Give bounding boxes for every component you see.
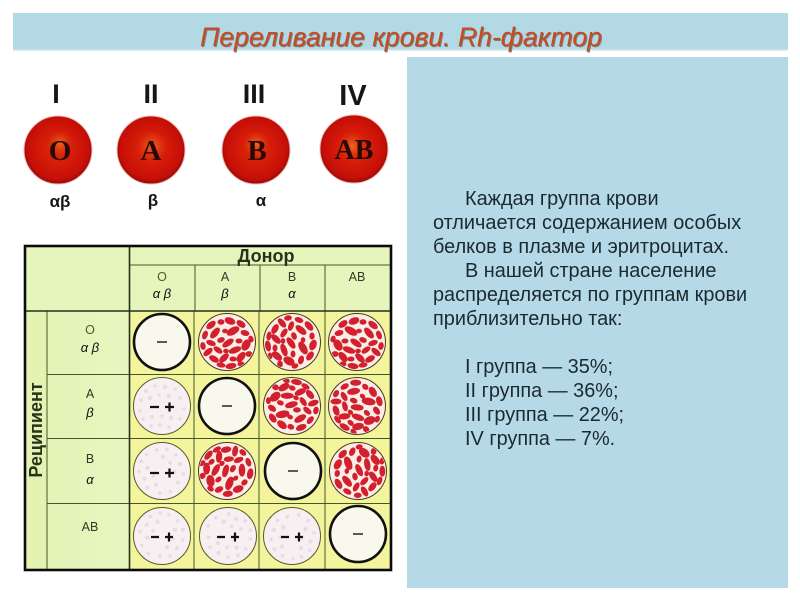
compatibility table [25,246,394,570]
row AB cells [130,504,386,568]
donor column labels: AB [349,270,365,284]
group I: αβ [50,192,70,211]
group IV: IV [339,80,367,112]
recipient row labels: α [86,472,94,487]
group III: B [247,135,267,167]
row A cells [134,369,394,444]
group I: O [49,135,71,167]
row O cells [134,314,386,370]
donor column labels: B [288,270,296,284]
group III: α [256,191,267,210]
heading: recipient: Реципиент [26,382,46,478]
donor column labels: β [220,286,229,301]
donor column labels: O [157,270,167,284]
group I: I [52,79,60,109]
recipient row labels: O [85,323,95,337]
recipient row labels [81,323,100,534]
text block: description: белков в плазме и эритроцитах. [433,236,729,258]
text block: percentages: III группа — 22%; [465,404,624,426]
group II: II [143,79,159,109]
recipient row labels: AB [82,520,98,534]
blood group circles [24,79,388,211]
title: Переливание крови. Rh-фактор [200,22,602,52]
text block: description: В нашей стране население [465,260,716,282]
text block: description: распределяется по группам крови [433,284,747,306]
text block: percentages [465,356,624,450]
donor column labels [153,270,365,301]
group II: A [141,135,162,167]
text block: description: Каждая группа крови [465,188,659,210]
donor column labels: A [221,270,230,284]
recipient row labels: A [86,387,95,401]
text block: percentages: IV группа — 7%. [465,428,615,450]
group IV: AB [335,135,373,166]
text block: description: приблизительно так: [433,308,622,330]
donor column labels: α [288,286,296,301]
group IV [320,80,388,183]
title: Переливание крови. Rh-фактор [201,23,603,53]
text block: description [433,188,747,330]
donor column labels: α β [153,286,172,301]
text block: percentages: I группа — 35%; [465,356,613,378]
heading: donor: Донор [238,246,294,266]
group II: β [148,191,158,210]
group II [117,79,185,210]
title bar [13,13,788,53]
group III [222,79,290,210]
group I [24,79,92,211]
group III: III [243,79,265,109]
recipient row labels: β [85,405,94,420]
row B cells [130,433,389,508]
panel: text [407,57,788,588]
text block: percentages: II группа — 36%; [465,380,619,402]
recipient row labels: α β [81,340,100,355]
recipient row labels: B [86,452,94,466]
text block: description: отличается содержанием особых [433,212,741,234]
